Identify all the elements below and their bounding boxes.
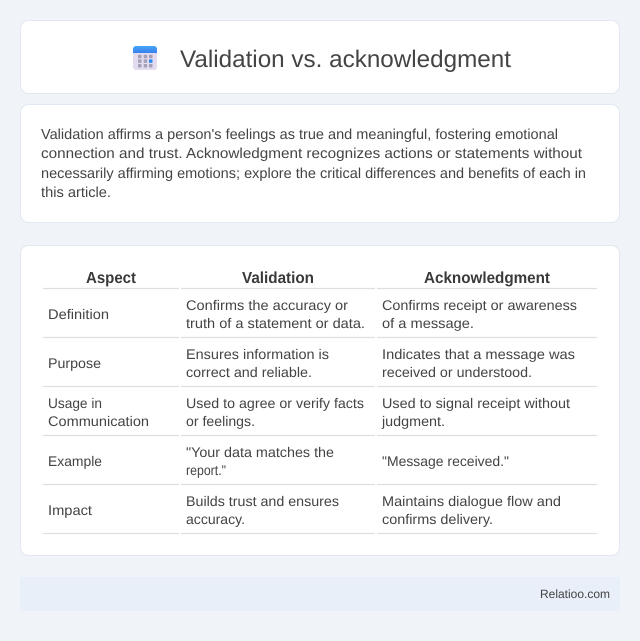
row: impact: accuracy. (186, 511, 245, 527)
row: impact: Maintains dialogue flow and (382, 493, 561, 509)
table header: Aspect (86, 270, 137, 287)
row: example: Example (48, 453, 102, 469)
row: purpose (48, 346, 575, 380)
intro text (41, 127, 586, 201)
row: example: report." (186, 462, 226, 478)
row: usage in communication: judgment. (381, 413, 445, 429)
row: purpose: Purpose (48, 355, 101, 371)
intro text: necessarily affirming emotions; explore the critical differences and benefits of each in (41, 166, 586, 182)
intro text: Validation affirms a person's feelings as true and meaningful, fostering emotional (41, 127, 558, 143)
row: purpose: received or understood. (382, 364, 532, 380)
intro text: connection and trust. Acknowledgment recognizes actions or statements without (41, 146, 582, 162)
row: usage in communication: Communication (48, 413, 149, 429)
table header (86, 270, 551, 287)
row: example (48, 444, 509, 478)
intro text: this article. (41, 185, 111, 201)
panel: header (20, 20, 620, 94)
table header: Acknowledgment (424, 270, 551, 287)
row: definition: of a message. (382, 315, 474, 331)
panel: intro (20, 104, 620, 222)
row: definition: Confirms the accuracy or (186, 297, 348, 313)
row: definition: Definition (48, 306, 109, 322)
row: impact: confirms delivery. (382, 511, 493, 527)
row: usage in communication: Usage in (48, 395, 102, 411)
footer text: Relatioo.com (540, 587, 610, 601)
row: usage in communication: or feelings. (186, 413, 255, 429)
row: definition (48, 297, 577, 331)
row: purpose: Ensures information is (186, 346, 329, 362)
row: definition: Confirms receipt or awareness (382, 297, 577, 313)
row: impact: Impact (48, 502, 92, 518)
title: Validation vs. acknowledgment (180, 46, 511, 73)
footer (20, 577, 620, 611)
icon: calendar (133, 46, 157, 70)
row: usage in communication: Used to agree or verify facts (186, 395, 364, 411)
row: usage in communication (48, 395, 570, 429)
row: impact: Builds trust and ensures (186, 493, 339, 509)
row: example: "Message received." (382, 453, 509, 469)
row: definition: truth of a statement or data. (186, 315, 365, 331)
panel: comparison table (20, 246, 620, 556)
row: example: "Your data matches the (186, 444, 334, 460)
row: purpose: Indicates that a message was (382, 346, 575, 362)
row: impact (48, 493, 561, 527)
row: purpose: correct and reliable. (186, 364, 312, 380)
row: usage in communication: Used to signal receipt without (382, 395, 570, 411)
table header: Validation (242, 270, 314, 287)
